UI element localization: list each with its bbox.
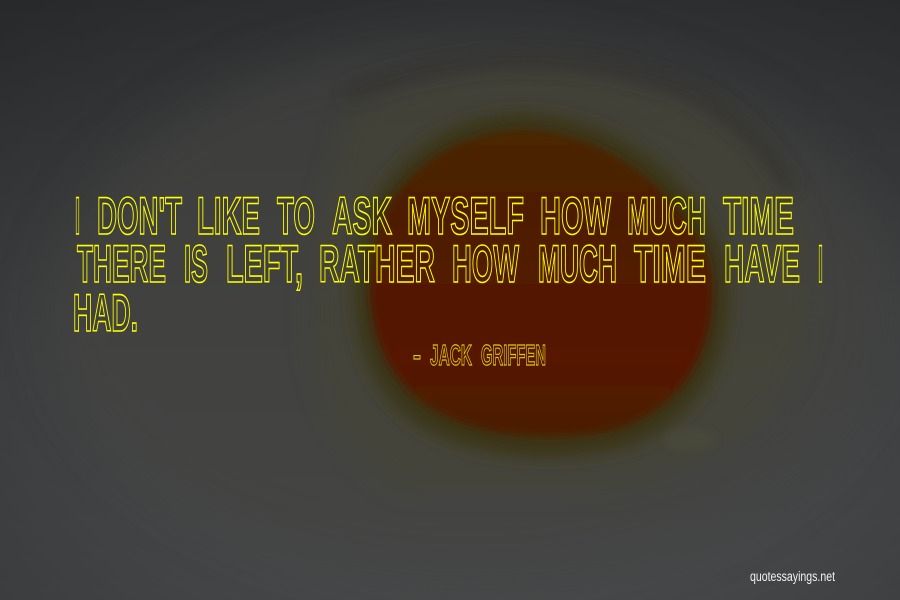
quote line 2: HOW [452, 235, 519, 294]
quote line 3: HAD. [73, 284, 138, 343]
quote line 1: HOW [540, 187, 611, 246]
quote line 2: HAVE [724, 235, 800, 294]
quote line 2: THERE [77, 235, 166, 294]
quote line 1: MUCH [627, 187, 706, 246]
quote line 1: I [75, 187, 80, 246]
quote line 2: TIME [634, 235, 706, 294]
quote line 1: LIKE [197, 187, 260, 246]
attribution [413, 340, 546, 372]
quote line 2: MUCH [538, 235, 617, 294]
quote text [73, 187, 823, 343]
quote line 1: TIME [723, 187, 794, 246]
watermark: quotessayings.net [750, 569, 835, 584]
quote line 1 [75, 187, 794, 246]
quote line 1: DON'T [97, 187, 182, 246]
attribution: GRIFFEN [481, 340, 546, 372]
quote line 2: IS [184, 235, 208, 294]
quote line 1: ASK [332, 187, 392, 246]
quote line 2: LEFT, [226, 235, 303, 294]
quote line 1: TO [277, 187, 315, 246]
quote line 2: RATHER [319, 235, 435, 294]
quote line 1: MYSELF [407, 187, 524, 246]
quote line 2 [77, 235, 823, 294]
attribution: JACK [430, 340, 472, 372]
attribution: - [413, 340, 421, 372]
text: I [818, 235, 823, 294]
